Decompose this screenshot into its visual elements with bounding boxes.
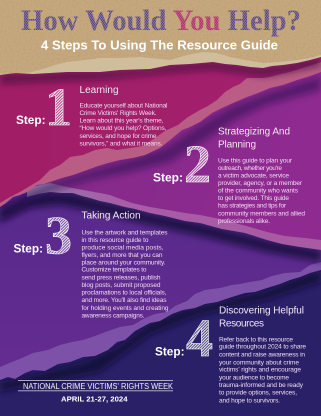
panel: step 1 magenta region [0,45,321,203]
step 4 body: to provide options, services, [219,389,297,396]
paper background [0,0,321,74]
torn strip: second tear [27,170,321,250]
footer: campaign name: NATIONAL CRIME VICTIMS' RIGHTS WEEK [23,382,174,391]
step 3 body [82,229,169,320]
step 2 label: Step: [153,173,183,185]
step 1 body: services, and hope for crime [80,133,157,140]
step 4 body: your community about crime [219,359,299,366]
step 2 body: to get involved. This guide [218,195,289,202]
step 3 label: Step: [14,244,43,256]
title: How Would You Help? [21,4,301,37]
step 3 block [14,206,169,320]
step 3 body: proclamations to local officials, [82,289,167,296]
panel: step 2 purple region [30,55,321,240]
step 3 body: send press releases, publish [82,274,161,281]
step 4 body: victims' rights and encourage [219,367,301,374]
step 2 body: provider, agency, or a member [218,180,303,187]
step 2 body: outreach, whether you're [218,165,282,172]
shadow under third tear [0,270,321,392]
torn strip: third tear [0,240,321,380]
panel: step 3 purple region [0,180,321,367]
step 3 numeral: 3 [45,206,72,266]
step 1 body: Learn about this year's theme, [80,118,164,124]
step 4 numeral: 4 [186,308,213,368]
step 3 body: awareness campaigns. [82,313,145,320]
torn paper light edge [0,40,321,75]
shadow under paper edge [0,57,321,84]
step 2 heading line 2: Planning [218,140,256,151]
step 1 heading: Learning [80,85,118,96]
step 1 label: Step: [16,115,46,127]
step 2 body: has strategies and tips for [218,203,287,210]
step 2 numeral: 2 [184,134,211,194]
step 3 body: produce social media posts, [82,245,164,252]
step 4 label: Step: [155,347,184,359]
footer: dates: APRIL 21-27, 2024 [61,395,128,404]
step 2 body: a victim advocate, service [218,172,289,179]
step 4 body: content and raise awareness in [219,351,305,358]
step 2 body: community members and allied [218,210,305,217]
step 3 body: place around your community. [82,259,166,266]
step 2 heading: Strategizing And [218,126,290,138]
step 3 body: in this resource guide to [82,237,149,244]
step 1 body: Educate yourself about National [80,102,168,110]
subtitle: 4 Steps To Using The Resource Guide [41,38,278,52]
step 4 heading: Discovering Helpful [219,305,304,316]
step 4 block [155,305,306,404]
step 1 numeral: 1 [45,77,72,137]
step 3 body: and more. You'll also find ideas [82,297,167,304]
step 3 body: Use the artwork and templates [82,229,168,236]
step 4 heading line 2: Resources [219,319,264,330]
step 3 body: Customize templates to [82,267,147,274]
step 2 block [153,126,305,225]
step 3 heading: Taking Action [82,210,140,221]
step 1 body: “How would you help? Options, [80,125,167,132]
step 4 body: Refer back to this resource [219,336,293,343]
torn strip: first tear [0,50,321,207]
step 4 body: trauma-informed and be ready [219,382,304,389]
step 1 body: survivors,” and what it means. [80,140,163,148]
step 4 body: guide throughout 2024 to share [219,344,306,351]
step 3 body: for holding events and creating [82,305,169,312]
step 3 body: blog posts, submit proposed [82,282,161,289]
step 1 body: Crime Victims' Rights Week. [80,110,157,117]
step 4 body: and hope to survivors. [219,397,280,404]
step 4 body [219,336,306,404]
footer [18,380,174,404]
step 1 block [16,77,168,148]
step 2 body [218,157,305,225]
step 2 body: of the community who wants [218,188,299,195]
step 4 body: your audience to become [219,374,289,381]
step 2 body: professionals alike. [218,218,270,225]
step 2 body: Use this guide to plan your [218,157,293,164]
shadow under second tear [0,192,321,262]
step 3 body: flyers, and more that you can [82,252,163,259]
shadow under first tear [0,76,321,222]
step 1 body [80,102,168,148]
